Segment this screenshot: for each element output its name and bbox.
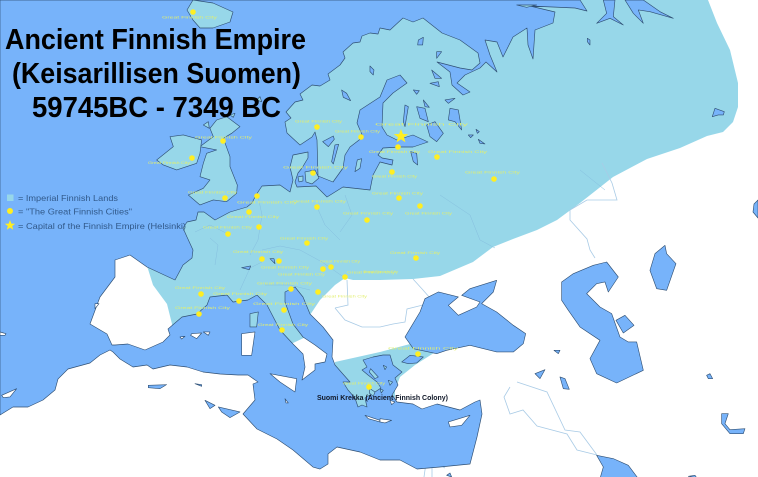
Iceland xyxy=(187,0,233,28)
eastern edge lake xyxy=(753,200,758,218)
Persian Gulf xyxy=(597,455,638,477)
city labels: Great Finnish City xyxy=(258,323,308,327)
Inner Asian and Near Eastern lakes xyxy=(447,350,745,477)
Cyprus xyxy=(448,415,470,427)
Funen xyxy=(298,176,303,182)
Russian and Finnish lakes xyxy=(403,37,724,165)
colony label: Suomi Krekka (Ancient Finnish Colony) xyxy=(317,393,448,402)
city labels: Great Finnish City xyxy=(388,346,458,350)
city labels: Great Finnish City xyxy=(253,302,315,306)
city labels: Great Finnish City xyxy=(203,226,252,230)
city labels: Great Finnish City xyxy=(347,270,395,274)
legend text: capital: = Capital of the Finnish Empire (Helsinki) xyxy=(18,221,186,231)
city labels: Great Finnish City xyxy=(175,306,230,310)
city labels: Great Finnish City xyxy=(322,294,367,298)
Swedish and Finnish lakes, islands xyxy=(298,66,374,184)
city labels: Great Finnish City xyxy=(293,200,346,204)
city labels: Great Finnish City xyxy=(257,282,312,286)
eastern seas and lakes xyxy=(380,245,745,477)
city labels: Great Finnish City xyxy=(295,120,342,124)
Kara-Bogaz lake xyxy=(616,315,634,333)
city labels: Great Finnish City xyxy=(175,286,225,290)
arctic gulfs xyxy=(403,0,724,165)
Caspian Sea xyxy=(562,262,643,383)
city labels: Great Finnish City xyxy=(213,292,267,296)
city labels: Great Finnish City xyxy=(372,192,423,196)
city labels: Great Finnish City xyxy=(369,150,420,154)
city labels: Great Finnish City xyxy=(335,130,380,134)
title xyxy=(5,24,306,124)
city labels: Great Finnish City xyxy=(465,170,520,174)
legend marker: cities xyxy=(7,208,13,214)
legend text: imperial lands: = Imperial Finnish Lands xyxy=(18,193,118,203)
Aral Sea xyxy=(650,245,676,290)
title: 59745BC - 7349 BC xyxy=(32,92,281,124)
Sea of Marmara xyxy=(402,355,423,364)
sea: Atlantic, Arctic, North Sea, Baltic and Mediterranean xyxy=(0,0,587,469)
Hebrides and Orkney islands xyxy=(203,97,262,128)
city labels: Great Finnish City xyxy=(343,212,393,216)
city labels: Great Finnish City xyxy=(261,266,309,270)
city labels: Great Finnish City xyxy=(278,272,325,276)
rivers on land xyxy=(335,163,617,477)
legend text: cities: = "The Great Finnish Cities" xyxy=(18,206,132,216)
city labels: Great Finnish City xyxy=(320,260,360,264)
rivers in the empire xyxy=(195,170,605,290)
city labels: Great Finnish City xyxy=(375,122,468,126)
city labels: Great Finnish City xyxy=(283,166,348,170)
city labels xyxy=(148,16,520,386)
title: Ancient Finnish Empire xyxy=(5,24,306,56)
Aegean islands xyxy=(369,365,395,405)
title: (Keisarillisen Suomen) xyxy=(12,58,301,90)
city labels: Great Finnish City xyxy=(162,16,217,20)
capital star: Helsinki xyxy=(394,129,408,142)
city markers xyxy=(189,9,497,390)
city labels: Great Finnish City xyxy=(188,190,237,194)
city labels: Great Finnish City xyxy=(280,236,328,240)
city labels: Great Finnish City xyxy=(195,136,252,140)
city labels: Great Finnish City xyxy=(428,150,487,154)
empire territory: mainland xyxy=(130,0,738,350)
Mediterranean and Atlantic islands xyxy=(0,259,395,422)
Crete xyxy=(380,419,392,423)
Black Sea xyxy=(405,280,526,354)
city labels: Great Finnish City xyxy=(343,382,385,386)
legend marker: capital xyxy=(5,220,15,230)
city labels: Great Finnish City xyxy=(405,212,452,216)
city labels: Great Finnish City xyxy=(148,161,190,165)
empire territory: Greek colony xyxy=(335,344,437,420)
city labels: Great Finnish City xyxy=(390,251,440,255)
Ireland xyxy=(157,135,202,170)
city labels: Great Finnish City xyxy=(233,250,283,254)
Great Britain xyxy=(188,117,240,205)
city labels: Great Finnish City xyxy=(237,200,297,204)
city labels: Great Finnish City xyxy=(372,174,417,178)
city labels: Great Finnish City xyxy=(363,270,398,274)
Zealand xyxy=(305,170,319,184)
legend swatch: imperial lands xyxy=(7,194,14,201)
legend xyxy=(5,193,186,231)
city labels: Great Finnish City xyxy=(227,215,279,219)
